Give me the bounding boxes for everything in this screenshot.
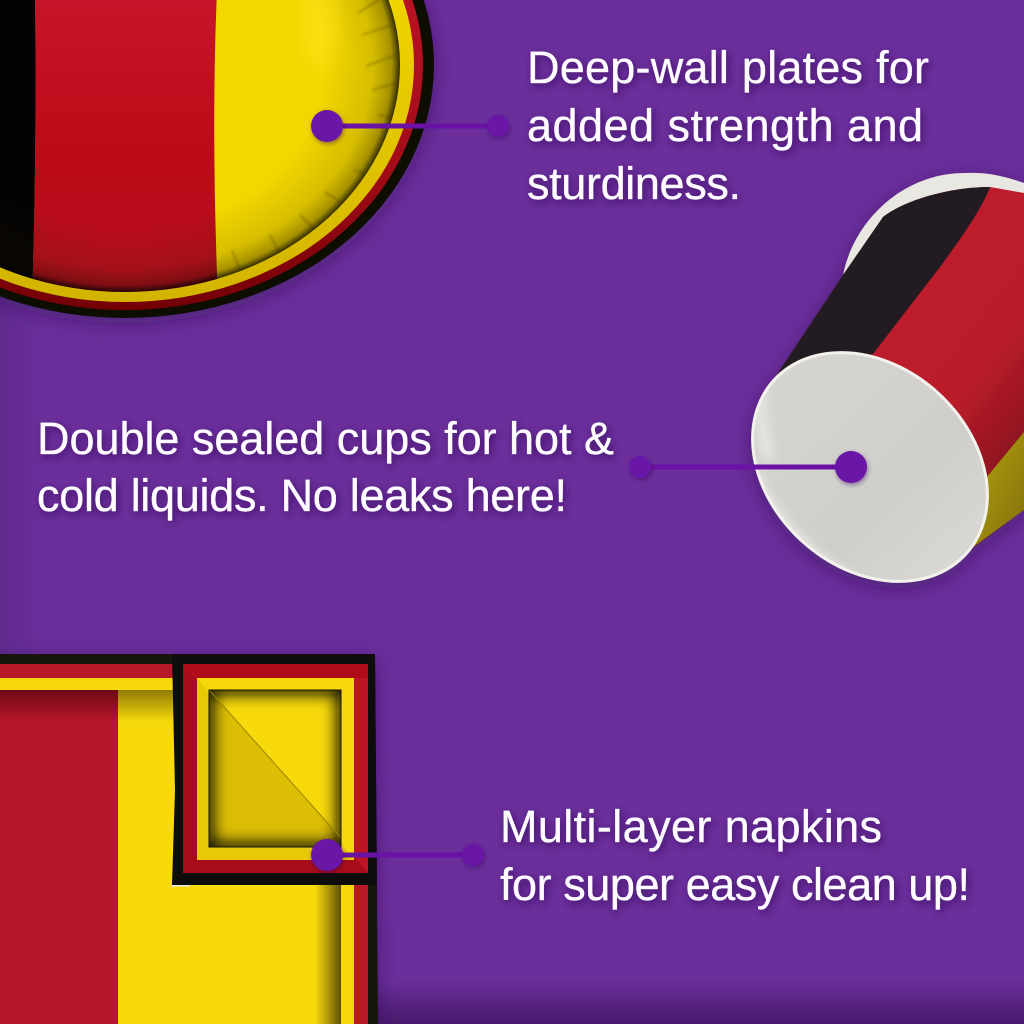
cup bbox=[742, 169, 1024, 596]
plate bbox=[0, 0, 450, 318]
callout: cups bbox=[629, 451, 867, 483]
text: napkins: Multi-layer napkins bbox=[500, 801, 882, 852]
text: napkins: for super easy clean up! bbox=[500, 859, 970, 910]
plate crimp lines bbox=[232, 0, 400, 282]
text: cups bbox=[37, 413, 614, 521]
text: cups: Double sealed cups for hot & bbox=[37, 413, 614, 464]
text: napkins bbox=[500, 801, 970, 910]
text: plates: added strength and bbox=[527, 100, 923, 151]
text: cups: cold liquids. No leaks here! bbox=[37, 470, 567, 521]
text: plates bbox=[527, 42, 929, 209]
napkin bbox=[0, 654, 378, 1024]
text: plates: sturdiness. bbox=[527, 158, 741, 209]
callout: plate bbox=[311, 110, 509, 142]
text: plates: Deep-wall plates for bbox=[527, 42, 929, 93]
callout: napkins bbox=[311, 839, 484, 871]
napkin fold bbox=[172, 654, 377, 885]
